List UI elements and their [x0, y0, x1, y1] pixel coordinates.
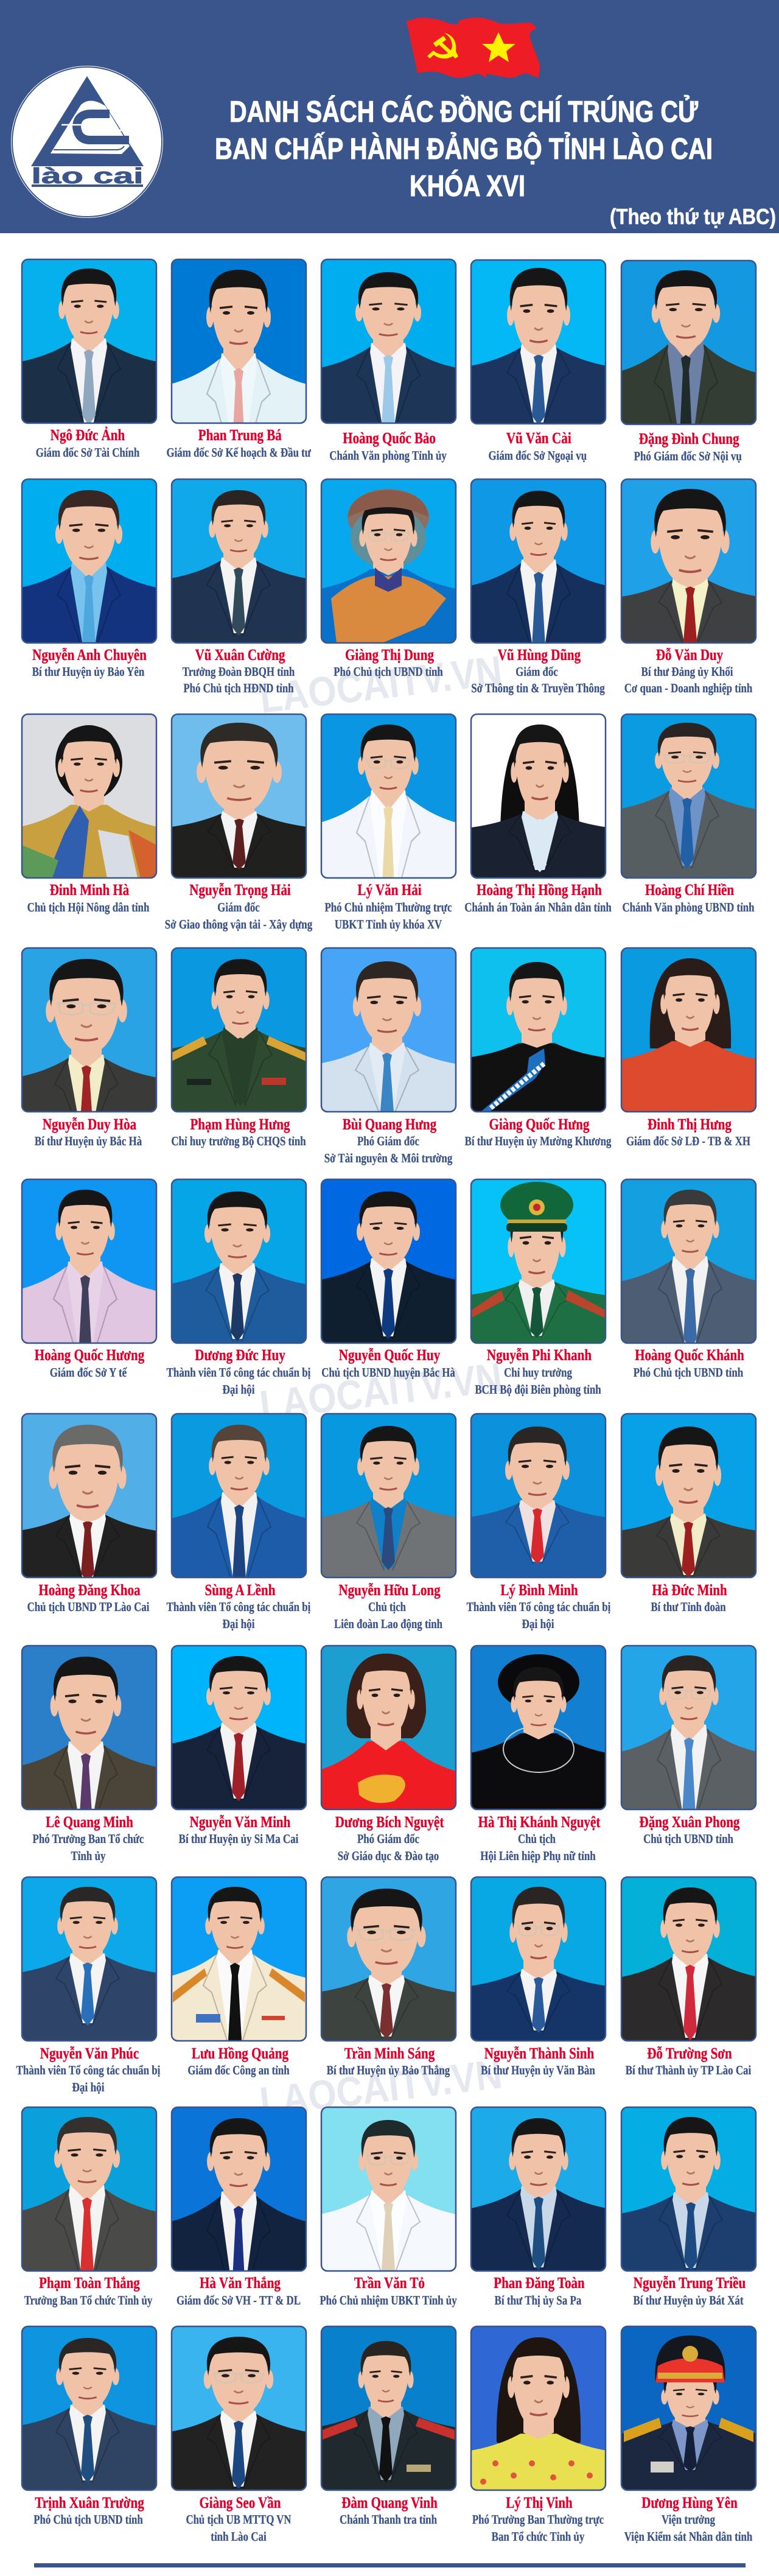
- name: Giàng Quốc Hưng: [489, 1115, 589, 1133]
- card: Phạm Toàn Thắng: [0, 2107, 245, 2411]
- icon: Lào Cai logo: lào cai: [32, 163, 144, 188]
- role: Chủ tịch: [518, 1831, 556, 1846]
- role: Bí thư Huyện ủy Bắc Hà: [35, 1134, 142, 1148]
- name: Nguyễn Anh Chuyên: [32, 646, 147, 664]
- role: Giám đốc Công an tỉnh: [187, 2063, 290, 2077]
- role: Bí thư Thành ủy TP Lào Cai: [626, 2063, 751, 2077]
- photo: Bùi Quang Hưng: [229, 948, 545, 1223]
- card: Lý Thị Vinh: [380, 2326, 697, 2576]
- name: Bùi Quang Hưng: [343, 1115, 436, 1133]
- name: Vũ Văn Cài: [506, 429, 571, 447]
- photo: Nguyễn Phi Khanh: [379, 1179, 695, 1413]
- role: Bí thư Huyện ủy Bát Xát: [633, 2293, 744, 2308]
- role: Phó Giám đốc: [357, 1831, 419, 1846]
- role: Giám đốc: [217, 900, 260, 914]
- role: [186, 2512, 291, 2544]
- card: Phan Đăng Toàn: [380, 2107, 697, 2379]
- icon: party flag: [407, 18, 540, 78]
- role: Chỉ huy trưởng: [504, 1365, 572, 1380]
- photo: Sùng A Lềnh: [81, 1414, 397, 1718]
- name: Lưu Hồng Quảng: [192, 2044, 288, 2062]
- card: Nguyễn Văn Minh: [80, 1646, 397, 1903]
- card: Lê Quang Minh: [0, 1646, 244, 1955]
- photo: Trịnh Xuân Trường: [0, 2326, 246, 2576]
- name: Nguyễn Văn Minh: [190, 1813, 291, 1831]
- name: Đỗ Văn Duy: [656, 646, 723, 664]
- name: Phạm Hùng Hưng: [190, 1115, 290, 1133]
- name: Hoàng Thị Hồng Hạnh: [477, 881, 602, 899]
- photo: Vũ Xuân Cường: [80, 479, 397, 737]
- role: Giám đốc Sở LĐ - TB & XH: [626, 1134, 750, 1148]
- card: Nguyễn Duy Hòa: [0, 948, 245, 1248]
- role: Thành viên Tổ công tác chuẩn bị: [467, 1599, 610, 1614]
- role: Phó Chủ tịch HĐND tỉnh: [183, 681, 294, 695]
- title: [215, 95, 713, 203]
- photo: Hoàng Quốc Khánh: [532, 1179, 779, 1470]
- name: Nguyễn Trung Triều: [634, 2274, 746, 2292]
- role: [624, 2512, 753, 2544]
- card: Bùi Quang Hưng: [229, 948, 545, 1223]
- role: Phó Trưởng Ban Tổ chức: [33, 1831, 144, 1846]
- role: Phó Chủ tịch UBND tỉnh: [33, 2512, 143, 2527]
- role: Liên đoàn Lao động tỉnh: [334, 1616, 442, 1631]
- card: Trần Minh Sáng: [228, 1877, 545, 2121]
- role: Hội Liên hiệp Phụ nữ tỉnh: [480, 1848, 596, 1863]
- card: Nguyễn Hữu Long: [230, 1414, 547, 1664]
- role: [167, 1365, 310, 1397]
- card: Nguyễn Anh Chuyên: [0, 479, 247, 776]
- role: Bí thư Tỉnh đoàn: [651, 1599, 726, 1614]
- photo: Giàng Thị Dung: [230, 479, 547, 765]
- photo: Trần Văn Tỏ: [230, 2107, 547, 2396]
- card: Đàm Quang Vinh: [228, 2326, 544, 2576]
- card: Hoàng Đăng Khoa: [0, 1414, 246, 1672]
- photo: Nguyễn Văn Phúc: [0, 1877, 246, 2119]
- card: Hoàng Thị Hồng Hạnh: [382, 714, 698, 951]
- name: Hà Đức Minh: [652, 1581, 727, 1599]
- photo: Đinh Minh Hà: [0, 714, 247, 1027]
- photo: Đặng Xuân Phong: [531, 1646, 779, 1958]
- role: Thành viên Tổ công tác chuẩn bị: [167, 1365, 310, 1380]
- role: Giám đốc Sở Y tế: [50, 1365, 128, 1380]
- watermark 1: LAOCAITV.VN: [257, 647, 505, 722]
- header band: [0, 0, 779, 233]
- name: Đàm Quang Vinh: [341, 2494, 438, 2511]
- role: Chánh án Toàn án Nhân dân tỉnh: [464, 900, 612, 914]
- card: Trịnh Xuân Trường: [0, 2326, 246, 2576]
- role: [334, 1599, 442, 1631]
- role: Sở Thông tin & Truyền Thông: [471, 681, 605, 695]
- watermark 3: LAOCAITV.VN: [257, 2051, 505, 2125]
- role: Đại hội: [223, 1382, 255, 1397]
- role: [480, 1831, 596, 1863]
- name: Lý Văn Hải: [357, 881, 422, 899]
- photo: Hoàng Đăng Khoa: [0, 1414, 246, 1672]
- card: Đỗ Văn Duy: [532, 479, 779, 743]
- role: Bí thư Huyện ủy Văn Bàn: [481, 2063, 595, 2077]
- title: KHÓA XVI: [410, 169, 525, 203]
- role: UBKT Tỉnh ủy khóa XV: [335, 917, 442, 932]
- card: Nguyễn Trung Triều: [533, 2107, 779, 2372]
- card: Đặng Xuân Phong: [531, 1646, 779, 1958]
- photo: Vũ Hùng Dũng: [380, 479, 697, 785]
- photo: Hoàng Quốc Bảo: [320, 258, 456, 424]
- card: Vũ Văn Cài: [470, 259, 606, 463]
- photo: Hà Văn Thắng: [80, 2107, 397, 2451]
- name: Nguyễn Hữu Long: [338, 1581, 441, 1599]
- name: Nguyễn Quốc Huy: [339, 1346, 440, 1364]
- name: Hoàng Quốc Bảo: [343, 429, 436, 447]
- card: Đinh Thị Hưng: [532, 948, 779, 1224]
- name: Dương Hùng Yên: [641, 2494, 738, 2511]
- name: Vũ Hùng Dũng: [498, 646, 581, 664]
- name: Trần Văn Tỏ: [354, 2274, 425, 2292]
- card: Giàng Seo Vần: [80, 2326, 397, 2576]
- role: Bí thư Huyện ủy Mường Khương: [465, 1134, 612, 1148]
- role: [167, 1599, 310, 1631]
- card: Vũ Xuân Cường: [80, 479, 397, 737]
- watermark 2: LAOCAITV.VN: [257, 1354, 505, 1429]
- photo: Phan Trung Bá: [170, 258, 307, 424]
- role: Phó Trưởng Ban Thường trực: [472, 2512, 604, 2527]
- name: Hà Văn Thắng: [200, 2274, 281, 2292]
- role: [324, 1134, 453, 1165]
- card: Phan Trung Bá: [167, 258, 312, 459]
- photo: Phan Đăng Toàn: [380, 2107, 697, 2379]
- role: Thành viên Tổ công tác chuẩn bị: [16, 2063, 160, 2077]
- name: Lý Thị Vinh: [506, 2494, 573, 2511]
- card: Lý Văn Hải: [230, 714, 547, 1070]
- name: Hà Thị Khánh Nguyệt: [478, 1813, 601, 1831]
- role: Ban Tổ chức Tỉnh ủy: [492, 2529, 585, 2544]
- name: Phan Trung Bá: [198, 426, 282, 444]
- name: Đặng Xuân Phong: [640, 1813, 739, 1831]
- name: Lê Quang Minh: [46, 1813, 133, 1831]
- role: [33, 1831, 144, 1863]
- icon: Lào Cai logo: [11, 66, 163, 218]
- name: Nguyễn Văn Phúc: [40, 2044, 139, 2062]
- card: Hoàng Chí Hiền: [529, 714, 779, 974]
- card: Giàng Quốc Hưng: [379, 948, 695, 1187]
- name: Vũ Xuân Cường: [195, 646, 285, 664]
- photo: Hoàng Thị Hồng Hạnh: [382, 714, 698, 951]
- name: Nguyễn Phi Khanh: [487, 1346, 592, 1364]
- photo: Nguyễn Duy Hòa: [0, 948, 245, 1248]
- role: [624, 664, 753, 695]
- card: Dương Đức Huy: [79, 1179, 396, 1443]
- photo: Trần Minh Sáng: [228, 1877, 545, 2121]
- role: Sở Giao thông vận tải - Xây dựng: [165, 917, 313, 932]
- name: Hoàng Quốc Hương: [35, 1346, 144, 1364]
- card: Nguyễn Trọng Hải: [81, 714, 397, 945]
- role: Trưởng Đoàn ĐBQH tỉnh: [183, 664, 295, 679]
- card: Lưu Hồng Quảng: [77, 1877, 393, 2183]
- name: Hoàng Chí Hiền: [645, 881, 734, 899]
- photo: Nguyễn Anh Chuyên: [0, 479, 247, 776]
- role: Tỉnh ủy: [71, 1848, 106, 1863]
- photo: Nguyễn Hữu Long: [230, 1414, 547, 1664]
- role: Phó Giám đốc: [357, 1134, 419, 1148]
- role: Giám đốc Sở Kế hoạch & Đầu tư: [166, 445, 311, 460]
- role: Cơ quan - Doanh nghiệp tỉnh: [624, 681, 753, 695]
- name: Phạm Toàn Thắng: [39, 2274, 140, 2292]
- photo: Lưu Hồng Quảng: [77, 1877, 393, 2183]
- role: Chủ tịch Hội Nông dân tỉnh: [27, 900, 150, 914]
- role: Phó Chủ nhiệm Thường trực: [325, 900, 452, 914]
- role: Bí thư Thị ủy Sa Pa: [495, 2293, 582, 2308]
- footer rule: [34, 2563, 746, 2567]
- photo: Phạm Hùng Hưng: [82, 948, 399, 1207]
- card: Vũ Hùng Dũng: [380, 479, 697, 785]
- card: Sùng A Lềnh: [81, 1414, 397, 1718]
- name: Hoàng Đăng Khoa: [38, 1581, 141, 1599]
- name: Lý Bình Minh: [500, 1581, 578, 1599]
- card: Hà Thị Khánh Nguyệt: [380, 1646, 697, 1929]
- role: Giám đốc Sở Ngoại vụ: [488, 448, 587, 463]
- photo: Dương Hùng Yên: [532, 2326, 779, 2539]
- role: Phó Chủ tịch UBND tỉnh: [334, 664, 443, 679]
- photo: Giàng Quốc Hưng: [379, 948, 695, 1187]
- card: Trần Văn Tỏ: [230, 2107, 547, 2396]
- role: Chỉ huy trưởng Bộ CHQS tỉnh: [171, 1134, 306, 1148]
- role: Chủ tịch UBND TP Lào Cai: [27, 1599, 150, 1614]
- role: Thành viên Tổ công tác chuẩn bị: [167, 1599, 310, 1614]
- card: Đỗ Trường Sơn: [532, 1877, 779, 2153]
- role: Phó Chủ tịch UBND tỉnh: [634, 1365, 743, 1380]
- photo: Nguyễn Trung Triều: [533, 2107, 779, 2372]
- role: [472, 2512, 604, 2544]
- role: [475, 1365, 601, 1397]
- name: Hoàng Quốc Khánh: [635, 1346, 744, 1364]
- photo: Hà Thị Khánh Nguyệt: [380, 1646, 697, 1929]
- card: Hà Văn Thắng: [80, 2107, 397, 2451]
- role: Chủ tịch UBND tỉnh: [643, 1831, 733, 1846]
- name: Nguyễn Duy Hòa: [43, 1115, 136, 1133]
- role: [165, 900, 313, 932]
- card: Hoàng Quốc Hương: [0, 1179, 243, 1507]
- card: Nguyễn Thành Sinh: [380, 1877, 697, 2115]
- photo: Ngô Đức Ảnh: [21, 258, 157, 424]
- role: Viện trưởng: [662, 2512, 715, 2527]
- photo: Nguyễn Trọng Hải: [81, 714, 397, 945]
- photo: Dương Đức Huy: [79, 1179, 396, 1443]
- card: Nguyễn Văn Phúc: [0, 1877, 246, 2119]
- photo: Phạm Toàn Thắng: [0, 2107, 245, 2411]
- name: Đinh Thị Hưng: [648, 1115, 732, 1133]
- photo: Nguyễn Quốc Huy: [230, 1179, 547, 1444]
- role: Trưởng Ban Tổ chức Tỉnh ủy: [24, 2293, 153, 2308]
- role: [183, 664, 295, 695]
- role: Giám đốc Sở VH - TT & DL: [176, 2293, 301, 2308]
- photo: Đàm Quang Vinh: [228, 2326, 544, 2576]
- role: Sở Giáo dục & Đào tạo: [338, 1848, 439, 1863]
- role: [471, 664, 605, 695]
- role: Sở Tài nguyên & Môi trường: [324, 1151, 453, 1165]
- name: Ngô Đức Ảnh: [51, 426, 125, 444]
- card: Hà Đức Minh: [530, 1414, 779, 1660]
- photo: Lê Quang Minh: [0, 1646, 244, 1955]
- name: Đinh Minh Hà: [50, 881, 129, 899]
- name: Trần Minh Sáng: [344, 2044, 435, 2062]
- card: Đặng Đình Chung: [528, 261, 779, 619]
- name: Sùng A Lềnh: [205, 1581, 276, 1599]
- role: tỉnh Lào Cai: [211, 2529, 267, 2544]
- role: [338, 1831, 439, 1863]
- role: Chủ tịch UB MTTQ VN: [186, 2512, 291, 2527]
- role: Đại hội: [223, 1616, 255, 1631]
- photo: Nguyễn Văn Minh: [80, 1646, 397, 1903]
- photo: Đỗ Văn Duy: [532, 479, 779, 743]
- role: Đại hội: [522, 1616, 554, 1631]
- name: Nguyễn Trọng Hải: [189, 881, 291, 899]
- role: BCH Bộ đội Biên phòng tỉnh: [475, 1382, 601, 1397]
- photo: Lý Bình Minh: [379, 1414, 696, 1646]
- photo: Dương Bích Nguyệt: [228, 1646, 544, 2035]
- photo: Giàng Seo Vần: [80, 2326, 397, 2576]
- role: Bí thư Huyện ủy Bảo Yên: [32, 664, 145, 679]
- photo: Hà Đức Minh: [530, 1414, 779, 1660]
- role: Chánh Thanh tra tỉnh: [340, 2512, 437, 2527]
- role: Giám đốc Sở Tài Chính: [36, 445, 140, 460]
- role: Bí thư Huyện ủy Si Ma Cai: [179, 1831, 298, 1846]
- card: Hoàng Quốc Khánh: [532, 1179, 779, 1470]
- photo: Nguyễn Thành Sinh: [380, 1877, 697, 2115]
- name: Giàng Thị Dung: [345, 646, 434, 664]
- card: Lý Bình Minh: [379, 1414, 696, 1646]
- role: Phó Chủ nhiệm UBKT Tỉnh ủy: [320, 2293, 457, 2308]
- role: Đại hội: [72, 2080, 105, 2094]
- role: Chánh Văn phòng Tỉnh ủy: [329, 448, 447, 463]
- photo: Đặng Đình Chung: [528, 261, 779, 619]
- name: Dương Bích Nguyệt: [335, 1813, 444, 1831]
- name: Phan Đăng Toàn: [494, 2274, 585, 2292]
- photo: Đinh Thị Hưng: [532, 948, 779, 1224]
- role: Bí thư Đảng ủy Khối: [641, 664, 733, 679]
- card: Giàng Thị Dung: [230, 479, 547, 765]
- role: [467, 1599, 610, 1631]
- card: Hoàng Quốc Bảo: [320, 258, 456, 463]
- role: Bí thư Huyện ủy Bảo Thắng: [327, 2063, 450, 2077]
- name: Đặng Đình Chung: [639, 430, 739, 447]
- card: Nguyễn Quốc Huy: [230, 1179, 547, 1444]
- role: Viện Kiểm sát Nhân dân tỉnh: [624, 2529, 753, 2544]
- role: [16, 2063, 160, 2094]
- card: Phạm Hùng Hưng: [82, 948, 399, 1207]
- role: Chủ tịch: [368, 1599, 406, 1614]
- card: Ngô Đức Ảnh: [21, 258, 157, 457]
- role: Chủ tịch UBND huyện Bắc Hà: [321, 1365, 455, 1380]
- role: Phó Giám đốc Sở Nội vụ: [634, 449, 742, 463]
- card: Dương Hùng Yên: [532, 2326, 779, 2544]
- photo: Lý Thị Vinh: [380, 2326, 697, 2576]
- photo: Lý Văn Hải: [230, 714, 547, 1070]
- photo: Hoàng Quốc Hương: [0, 1179, 243, 1507]
- card: Dương Bích Nguyệt: [228, 1646, 544, 2035]
- name: Trịnh Xuân Trường: [35, 2494, 144, 2511]
- name: Nguyễn Thành Sinh: [484, 2044, 595, 2062]
- name: Giàng Seo Vần: [200, 2494, 281, 2511]
- card: Nguyễn Phi Khanh: [379, 1179, 695, 1413]
- card: Đinh Minh Hà: [0, 714, 247, 1027]
- role: [325, 900, 452, 932]
- photo: Vũ Văn Cài: [470, 259, 606, 425]
- photo: Hoàng Chí Hiền: [529, 714, 779, 974]
- role: Giám đốc: [515, 664, 558, 679]
- name: Đỗ Trường Sơn: [647, 2044, 732, 2062]
- photo: Đỗ Trường Sơn: [532, 1877, 779, 2153]
- name: Dương Đức Huy: [195, 1346, 285, 1364]
